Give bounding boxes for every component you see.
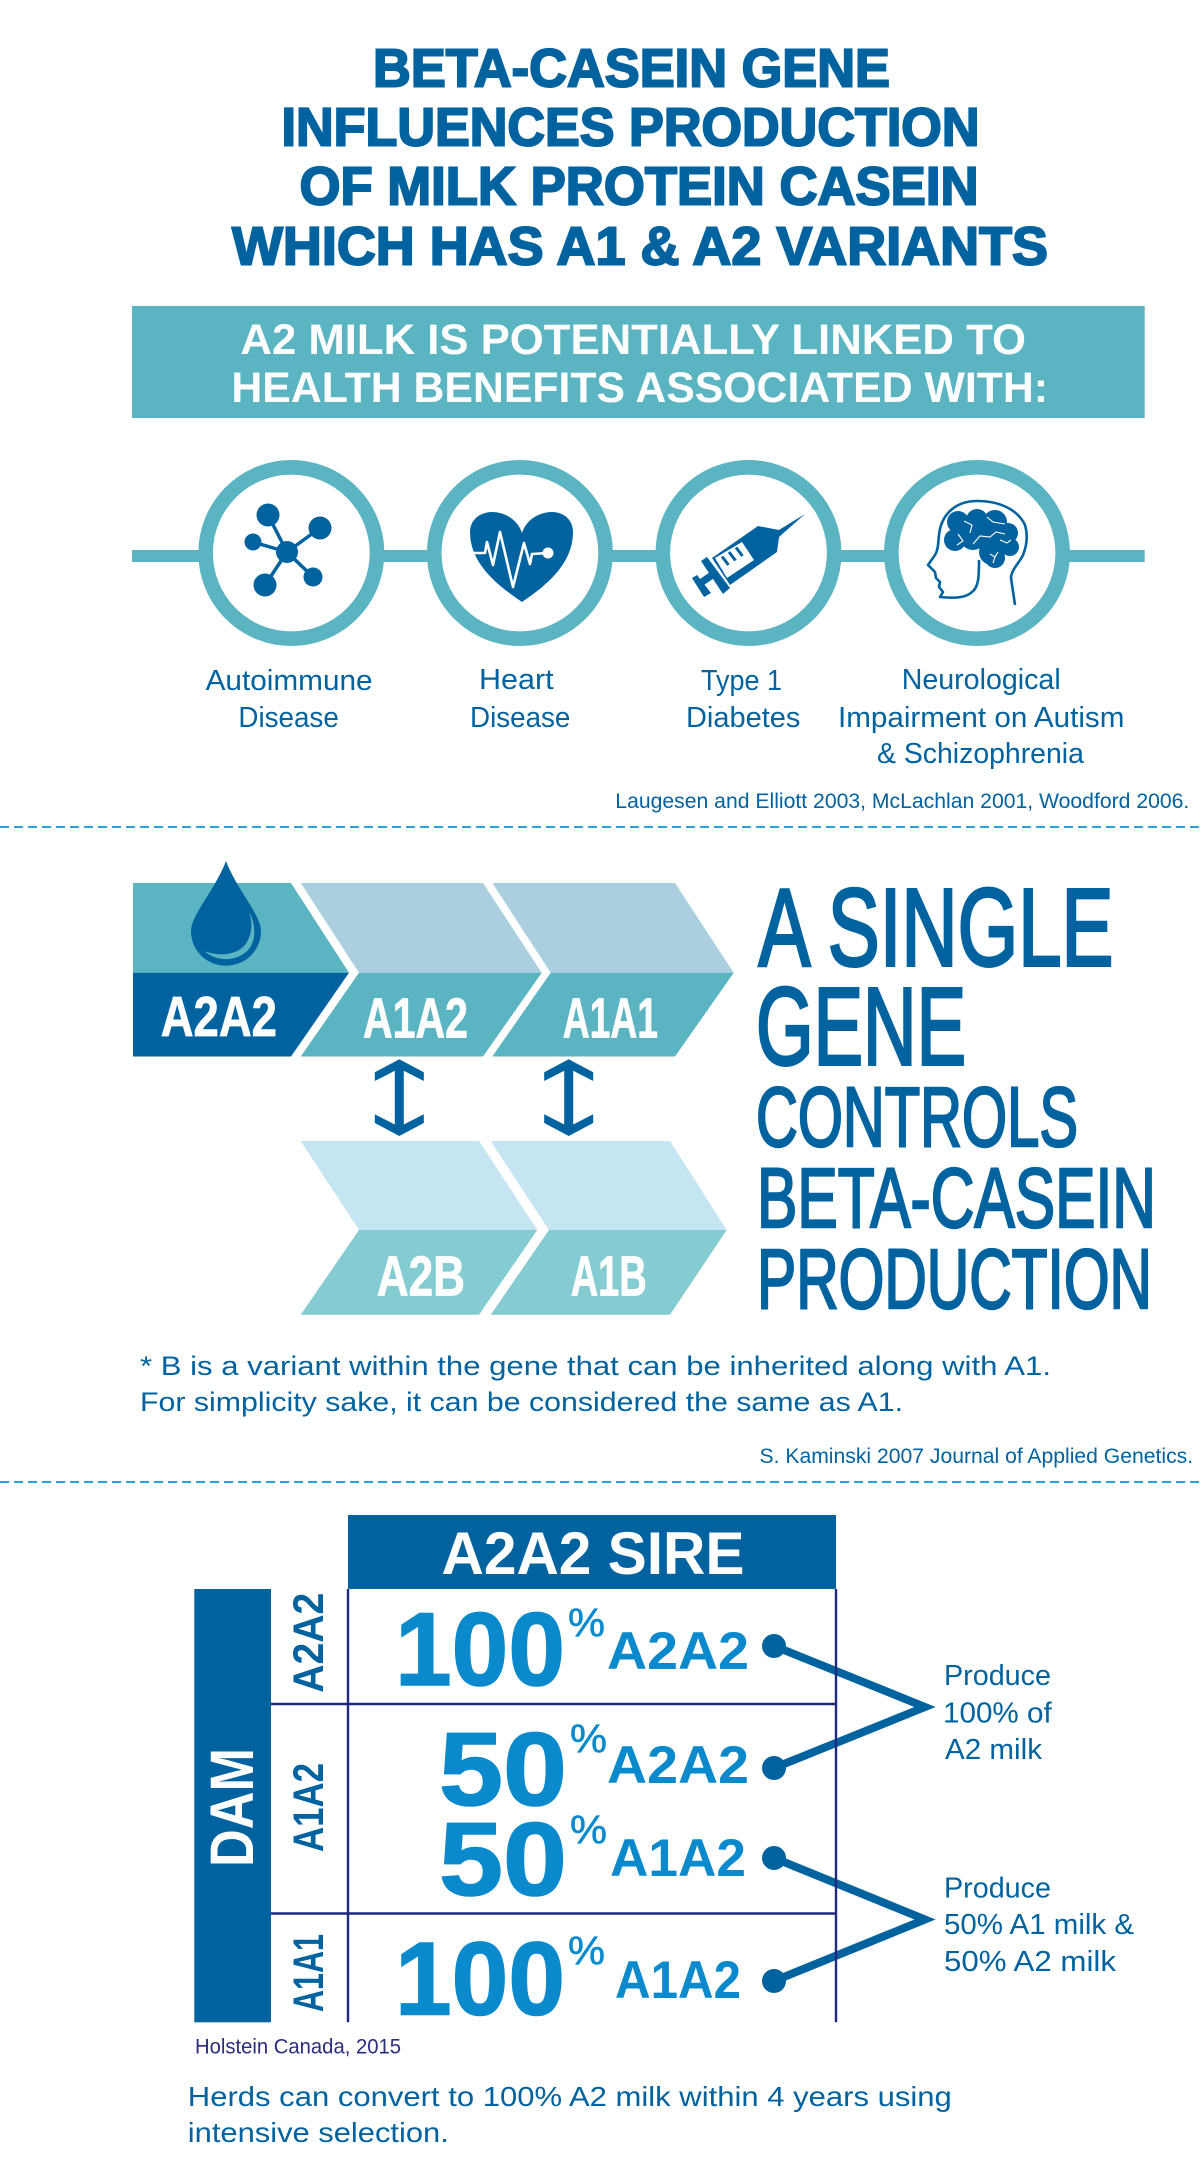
row: 50% A2A2: % bbox=[570, 1718, 607, 1762]
row: 50% A1A2: % bbox=[570, 1808, 607, 1852]
row: 100% A1A2: 100 bbox=[395, 1922, 565, 2038]
banner: health benefits: HEALTH BENEFITS ASSOCIATED WITH: bbox=[231, 364, 1048, 412]
chevron: A1A2: A1A2 bbox=[363, 986, 468, 1050]
label: autoimmune disease: Disease bbox=[238, 702, 339, 734]
row: 50% A2A2 bbox=[439, 1712, 749, 1828]
table side bar: dam bbox=[194, 1589, 271, 2022]
chevron: A1B bbox=[491, 1141, 727, 1315]
heading: a single gene controls beta-casein production: GENE bbox=[756, 966, 966, 1088]
row label: A1A1: A1A1 bbox=[285, 1934, 333, 2012]
chevron: A1A2 bbox=[301, 883, 542, 1056]
note: B variant bbox=[140, 1351, 1051, 1417]
title bbox=[232, 38, 1048, 276]
label: heart disease: Heart bbox=[479, 664, 554, 696]
title: OF MILK PROTEIN CASEIN bbox=[300, 156, 978, 216]
icon: head with brain bbox=[928, 501, 1027, 605]
callout: produce 100% A2: 100% of bbox=[943, 1697, 1053, 1729]
label: autoimmune disease bbox=[206, 665, 373, 734]
callout: produce 100% A2 bbox=[943, 1660, 1053, 1766]
icon: molecule bbox=[244, 504, 332, 596]
row label: A2A2: A2A2 bbox=[285, 1593, 333, 1693]
arrow: A1A2 to A2B bbox=[375, 1059, 424, 1136]
icon: water drop bbox=[191, 861, 261, 966]
bracket: 50/50 bbox=[762, 1846, 925, 1993]
bracket: 100% A2 bbox=[762, 1634, 925, 1780]
table side bar: dam: DAM bbox=[198, 1748, 266, 1867]
row: 100% A2A2: 100 bbox=[395, 1592, 565, 1708]
callout: produce 50/50 bbox=[944, 1872, 1134, 1978]
label: neurological impairment: Neurological bbox=[902, 664, 1061, 696]
label: neurological impairment: Impairment on Autism bbox=[838, 702, 1124, 734]
row: 100% A2A2: % bbox=[568, 1602, 605, 1646]
label: heart disease bbox=[470, 664, 570, 734]
label: neurological impairment: & Schizophrenia bbox=[877, 738, 1085, 770]
citation: health studies: Laugesen and Elliott 2003, McLachlan 2001, Woodford 2006. bbox=[615, 790, 1189, 813]
closing text: Herds can convert to 100% A2 milk within 4 years using bbox=[188, 2081, 952, 2112]
label: type 1 diabetes: Type 1 bbox=[701, 665, 782, 697]
note: B variant: For simplicity sake, it can be considered the same as A1. bbox=[140, 1387, 903, 1417]
row: 50% A2A2: 50 bbox=[439, 1712, 567, 1828]
table header: A2A2 sire bbox=[348, 1515, 836, 1589]
table header: A2A2 sire: A2A2 SIRE bbox=[442, 1520, 744, 1587]
label: heart disease: Disease bbox=[470, 702, 570, 734]
note: B variant: * B is a variant within the gene that can be inherited along with A1. bbox=[140, 1351, 1051, 1381]
label: neurological impairment bbox=[838, 664, 1124, 770]
title: BETA-CASEIN GENE bbox=[373, 38, 890, 98]
row: 100% A1A2: A1A2 bbox=[615, 1951, 741, 2010]
row: 100% A1A2 bbox=[395, 1922, 741, 2038]
chevron: A2B: A2B bbox=[377, 1244, 465, 1308]
chevron: A1B: A1B bbox=[571, 1244, 647, 1308]
banner: health benefits bbox=[132, 306, 1145, 418]
label: type 1 diabetes: Diabetes bbox=[686, 702, 800, 734]
row label: A1A2: A1A2 bbox=[285, 1763, 333, 1852]
connector bar with rings bbox=[132, 467, 1145, 639]
citation: Kaminski: S. Kaminski 2007 Journal of Applied Genetics. bbox=[760, 1445, 1193, 1468]
banner: health benefits: A2 MILK IS POTENTIALLY LINKED TO bbox=[240, 316, 1026, 364]
chevron: A1A1 bbox=[492, 883, 734, 1056]
chevron: A2B bbox=[301, 1141, 537, 1315]
arrow: A1A1 to A1B bbox=[544, 1059, 593, 1136]
closing text bbox=[188, 2081, 952, 2148]
row: 100% A2A2 bbox=[395, 1592, 749, 1708]
icon: syringe bbox=[692, 514, 805, 597]
title: WHICH HAS A1 & A2 VARIANTS bbox=[232, 216, 1048, 276]
heading: a single gene controls beta-casein production bbox=[756, 866, 1156, 1326]
chevron: A2A2 bbox=[133, 883, 349, 1056]
callout: produce 100% A2: Produce bbox=[944, 1660, 1051, 1692]
chevron: A2A2: A2A2 bbox=[161, 985, 277, 1049]
callout: produce 50/50: 50% A1 milk & bbox=[944, 1909, 1134, 1941]
icon: heart with pulse bbox=[470, 512, 573, 602]
row: 50% A2A2: A2A2 bbox=[607, 1736, 749, 1795]
row: 100% A1A2: % bbox=[568, 1930, 605, 1974]
title: INFLUENCES PRODUCTION bbox=[282, 98, 980, 158]
label: type 1 diabetes bbox=[686, 665, 800, 734]
callout: produce 100% A2: A2 milk bbox=[945, 1734, 1043, 1766]
closing text: intensive selection. bbox=[188, 2117, 449, 2148]
callout: produce 50/50: 50% A2 milk bbox=[944, 1946, 1117, 1978]
callout: produce 50/50: Produce bbox=[944, 1872, 1051, 1904]
label: autoimmune disease: Autoimmune bbox=[206, 665, 373, 697]
row: 50% A1A2 bbox=[439, 1802, 746, 1918]
row: 50% A1A2: 50 bbox=[439, 1802, 567, 1918]
citation: Holstein Canada: Holstein Canada, 2015 bbox=[195, 2035, 401, 2058]
row: 50% A1A2: A1A2 bbox=[610, 1829, 746, 1888]
chevron: A1A1: A1A1 bbox=[563, 986, 658, 1050]
row: 100% A2A2: A2A2 bbox=[607, 1622, 749, 1681]
